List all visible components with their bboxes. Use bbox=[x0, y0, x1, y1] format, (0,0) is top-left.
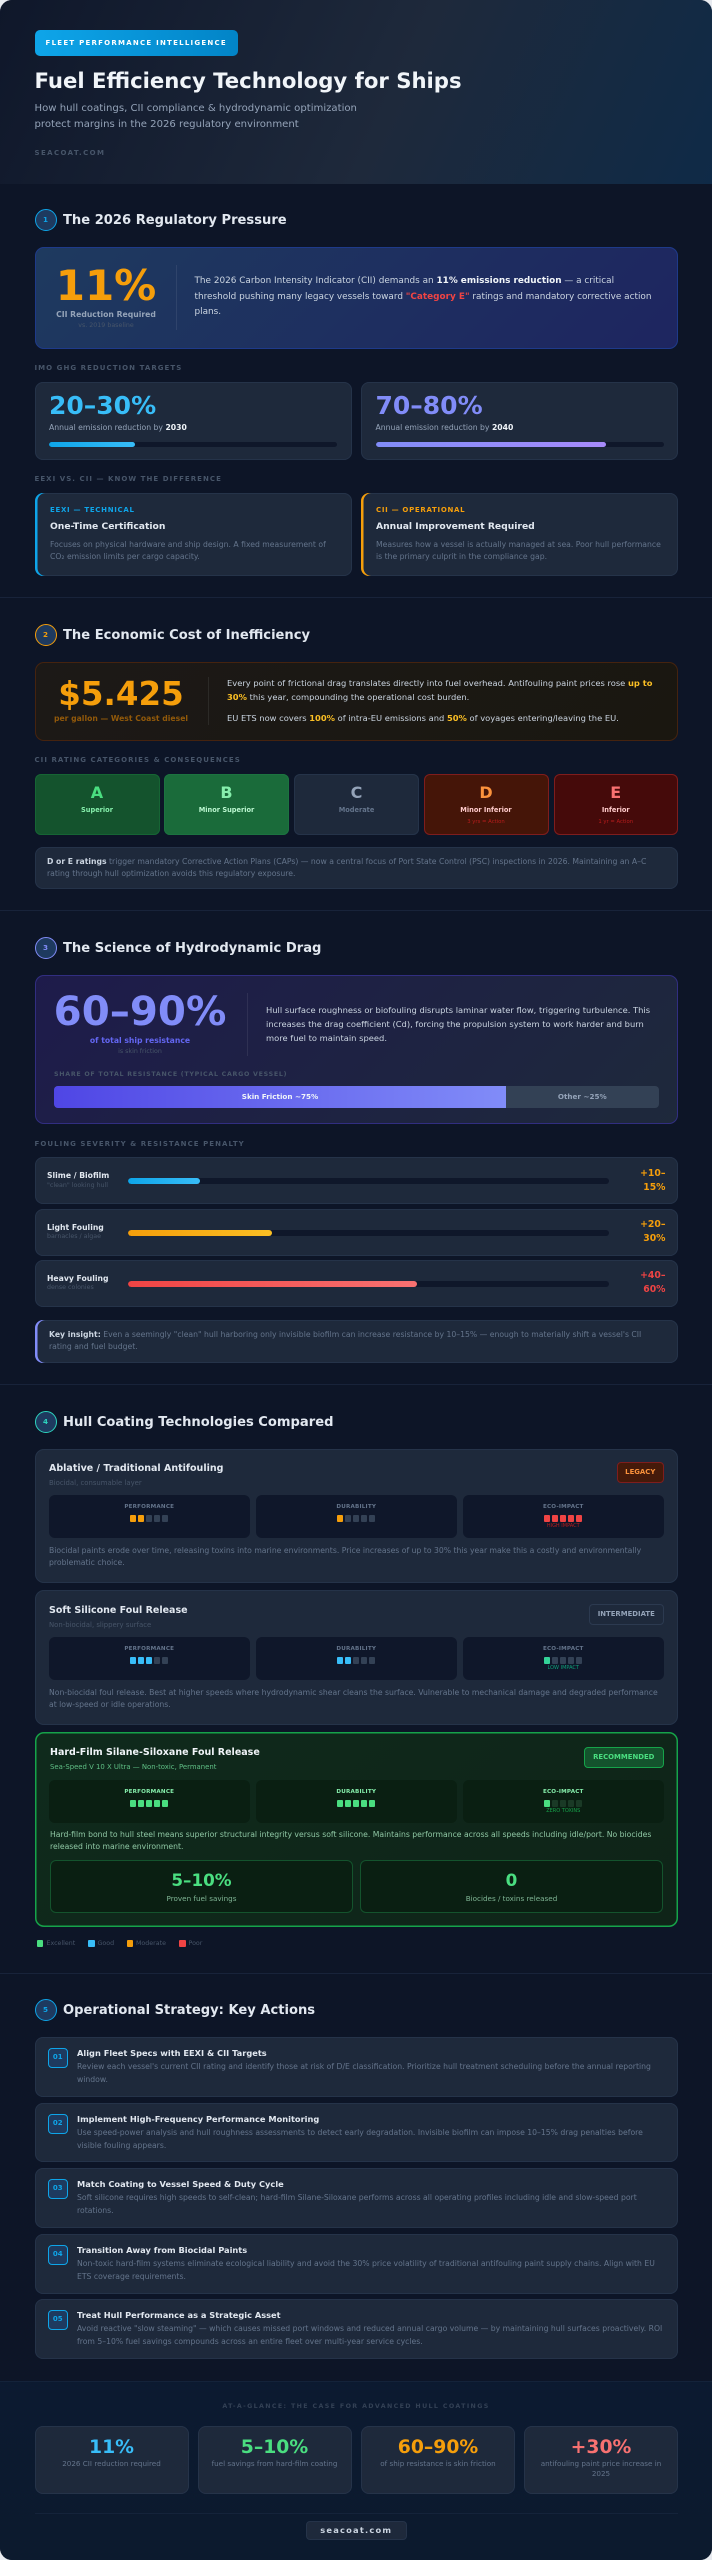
metric performance bbox=[49, 1495, 250, 1538]
note text: rating through hull optimization avoids this regulatory exposure. bbox=[47, 869, 295, 878]
description: problematic choice. bbox=[49, 1558, 125, 1567]
name: Hard-Film Silane-Siloxane Foul Release bbox=[50, 1747, 260, 1758]
description: Soft silicone requires high speeds to self-clean; hard-film Silane-Siloxane performs across all operating profiles including idle and slow-speed port bbox=[77, 2193, 637, 2202]
panel: fuel price hero bbox=[34, 662, 678, 741]
description bbox=[50, 540, 326, 561]
moderate swatch bbox=[126, 1940, 133, 1947]
subtitle: Sea-Speed V 10 X Ultra — Non-toxic, Permanent bbox=[50, 1762, 216, 1770]
value: 15% bbox=[643, 1182, 666, 1192]
section 2 number bbox=[34, 624, 56, 646]
rating dots bbox=[130, 1657, 168, 1664]
letter: B bbox=[220, 783, 233, 802]
description: CO₂ emission limits per cargo capacity. bbox=[50, 552, 200, 561]
hero text 2: EU ETS now covers 100% of intra-EU emissions and 50% of voyages entering/leaving the EU. bbox=[227, 713, 619, 723]
subtitle bbox=[34, 103, 357, 130]
panel: drag hero bbox=[34, 975, 678, 1124]
description: Annual emission reduction by 2040 bbox=[376, 423, 513, 432]
badge: FLEET PERFORMANCE INTELLIGENCE bbox=[46, 39, 227, 47]
rating dots bbox=[130, 1515, 168, 1522]
description bbox=[77, 2259, 655, 2281]
consequence: 3 yrs = Action bbox=[467, 818, 505, 824]
section 1 heading: The 2026 Regulatory Pressure bbox=[63, 213, 287, 228]
section label: fouling: FOULING SEVERITY & RESISTANCE PENALTY bbox=[34, 1140, 245, 1148]
summary card 5-10% bbox=[198, 2426, 352, 2494]
hero text: plans. bbox=[194, 307, 221, 317]
impact note: ZERO TOXINS bbox=[546, 1808, 580, 1814]
number bbox=[48, 2245, 68, 2264]
tag: CII — OPERATIONAL bbox=[376, 506, 465, 514]
price label: per gallon — West Coast diesel bbox=[54, 714, 188, 723]
description: Use speed-power analysis and hull roughness assessments to detect early degradation. Invisible biofilm can impose 10–15% drag penalties before bbox=[77, 2128, 643, 2137]
label: DURABILITY bbox=[336, 1788, 376, 1794]
rating dots bbox=[130, 1800, 168, 1807]
name: Heavy Fouling bbox=[47, 1274, 108, 1282]
title: Fuel Efficiency Technology for Ships bbox=[34, 68, 462, 93]
label bbox=[541, 2459, 661, 2478]
hero text bbox=[194, 276, 651, 317]
metric eco-impact bbox=[463, 1495, 664, 1538]
section 1 number: 1 bbox=[43, 215, 48, 224]
value: 11% bbox=[89, 2437, 134, 2458]
badge legacy: LEGACY bbox=[625, 1468, 655, 1476]
description bbox=[77, 2193, 637, 2215]
description: Review each vessel's current CII rating and identify those at risk of D/E classification. Prioritize hull treatment scheduling before the annual reporting bbox=[77, 2062, 651, 2071]
panel: EEXI bbox=[34, 493, 352, 576]
row: slime bbox=[34, 1157, 678, 1204]
description: Hard-film bond to hull steel means superior structural integrity versus soft silicone. Maintains performance across all speeds including idle/port. No biocides bbox=[50, 1830, 651, 1839]
name: Slime / Biofilm bbox=[47, 1171, 109, 1180]
stat sublabel: vs. 2019 baseline bbox=[78, 322, 134, 328]
skin friction segment bbox=[54, 1086, 506, 1108]
heading: Match Coating to Vessel Speed & Duty Cycle bbox=[77, 2179, 284, 2189]
name: Ablative / Traditional Antifouling bbox=[49, 1463, 223, 1474]
description: Avoid reactive "slow steaming" — which causes missed port windows and reduced annual cargo volume — by maintaining hull surfaces proactively. ROI bbox=[77, 2324, 662, 2333]
action 04 bbox=[34, 2234, 678, 2294]
action 01 bbox=[34, 2037, 678, 2097]
badge intermediate bbox=[589, 1604, 664, 1625]
note: D or E ratings bbox=[34, 847, 678, 889]
value: 30% bbox=[643, 1233, 666, 1244]
section 5 number bbox=[34, 1999, 56, 2021]
footer heading: AT-A-GLANCE: THE CASE FOR ADVANCED HULL COATINGS bbox=[222, 2403, 490, 2410]
section 2 heading: The Economic Cost of Inefficiency bbox=[63, 628, 310, 643]
note: dense colonies bbox=[47, 1284, 94, 1291]
letter: D bbox=[479, 783, 493, 802]
label: 2025 bbox=[592, 2469, 610, 2478]
label: Proven fuel savings bbox=[166, 1894, 236, 1903]
heading: Transition Away from Biocidal Paints bbox=[77, 2245, 247, 2255]
value: 5–10% bbox=[241, 2437, 308, 2458]
hero text: 30% this year, compounding the operational cost burden. bbox=[227, 692, 469, 702]
source label: SEACOAT.COM bbox=[34, 149, 105, 157]
tag: EEXI — TECHNICAL bbox=[50, 506, 135, 514]
subtitle: How hull coatings, CII compliance & hydrodynamic optimization bbox=[34, 103, 357, 114]
section 2 number: 2 bbox=[43, 630, 48, 639]
section 4 number bbox=[34, 1411, 56, 1433]
callout: key insight bbox=[34, 1320, 678, 1363]
value: 60–90% bbox=[398, 2437, 478, 2458]
section label: EEXI vs CII: EEXI VS. CII — KNOW THE DIFFERENCE bbox=[34, 475, 222, 483]
metric performance bbox=[49, 1637, 250, 1680]
section 3 number: 3 bbox=[43, 943, 48, 952]
rating dots bbox=[544, 1800, 582, 1807]
value: +10– bbox=[640, 1168, 666, 1178]
name: Moderate bbox=[339, 806, 374, 814]
progress bar bbox=[49, 442, 337, 447]
metric durability bbox=[256, 1495, 456, 1538]
description: visible fouling appears. bbox=[77, 2141, 166, 2150]
value: 70–80% bbox=[376, 391, 483, 420]
label: ECO-IMPACT bbox=[543, 1504, 584, 1510]
value bbox=[640, 1270, 666, 1295]
legend bbox=[37, 1940, 202, 1947]
letter: E bbox=[610, 783, 621, 802]
heading: Annual Improvement Required bbox=[376, 521, 535, 532]
subtitle: protect margins in the 2026 regulatory environment bbox=[34, 119, 299, 130]
description: from 5–10% fuel savings compounds across an entire fleet over multi-year service cycles. bbox=[77, 2337, 423, 2346]
number bbox=[48, 2048, 68, 2068]
note: barnacles / algae bbox=[47, 1233, 101, 1240]
label: 2026 CII reduction required bbox=[62, 2459, 161, 2468]
metric eco-impact bbox=[463, 1780, 664, 1823]
letter: A bbox=[91, 783, 103, 802]
number bbox=[48, 2114, 68, 2134]
skin friction segment: Skin Friction ~75% bbox=[242, 1092, 318, 1101]
stat label: of total ship resistance bbox=[90, 1036, 190, 1045]
label: PERFORMANCE bbox=[124, 1646, 174, 1652]
subtitle: Non-biocidal, slippery surface bbox=[49, 1620, 151, 1628]
heading: Implement High-Frequency Performance Monitoring bbox=[77, 2114, 319, 2124]
description bbox=[49, 1688, 658, 1709]
description bbox=[376, 540, 661, 561]
description bbox=[49, 1546, 641, 1567]
section 3 number bbox=[34, 937, 56, 959]
big stat: 60–90% bbox=[54, 988, 226, 1035]
badge recommended bbox=[584, 1747, 664, 1768]
metric eco-impact bbox=[463, 1637, 664, 1680]
value: +40– bbox=[640, 1270, 666, 1281]
name: Minor Inferior bbox=[460, 806, 512, 814]
big stat 11%: 11% bbox=[56, 261, 156, 310]
hero text: increases the drag coefficient (Cd), forcing the propulsion system to work harder and burn bbox=[266, 1019, 644, 1029]
impact note: HIGH IMPACT bbox=[547, 1523, 580, 1529]
footer band bbox=[0, 2381, 712, 2560]
hero text bbox=[266, 1005, 650, 1043]
section 4 heading: Hull Coating Technologies Compared bbox=[63, 1415, 333, 1430]
rating dots bbox=[544, 1657, 582, 1664]
progress bar bbox=[376, 442, 664, 447]
badge legacy bbox=[617, 1462, 664, 1483]
footer button bbox=[306, 2521, 406, 2540]
number: 02 bbox=[53, 2119, 63, 2127]
number bbox=[48, 2310, 68, 2330]
label: antifouling paint price increase in bbox=[541, 2459, 661, 2468]
summary card +30% bbox=[524, 2426, 678, 2494]
number: 04 bbox=[53, 2250, 63, 2258]
subtitle: Biocidal, consumable layer bbox=[49, 1478, 142, 1486]
moderate label: Moderate bbox=[136, 1940, 166, 1947]
heading: Treat Hull Performance as a Strategic Asset bbox=[77, 2310, 281, 2320]
section 1 number bbox=[34, 209, 56, 231]
description: window. bbox=[77, 2075, 108, 2084]
name: Soft Silicone Foul Release bbox=[49, 1605, 188, 1616]
stat: fuel savings bbox=[50, 1860, 353, 1913]
callout text bbox=[49, 1330, 641, 1351]
value bbox=[640, 1219, 666, 1244]
hero text bbox=[227, 678, 652, 702]
rating dots bbox=[337, 1657, 375, 1664]
label: PERFORMANCE bbox=[124, 1504, 174, 1510]
stat label: CII Reduction Required bbox=[56, 310, 156, 319]
label: ECO-IMPACT bbox=[543, 1788, 584, 1794]
description bbox=[77, 2062, 651, 2084]
section 4 number: 4 bbox=[43, 1417, 48, 1426]
description bbox=[77, 2128, 643, 2150]
action 05 bbox=[34, 2299, 678, 2359]
description: Measures how a vessel is actually managed at sea. Poor hull performance bbox=[376, 540, 661, 549]
letter: C bbox=[351, 783, 362, 802]
note: "clean" looking hull bbox=[47, 1182, 108, 1189]
number: 03 bbox=[53, 2184, 63, 2192]
excellent label: Excellent bbox=[46, 1940, 75, 1947]
row: light fouling bbox=[34, 1208, 678, 1256]
panel: ablative coating bbox=[34, 1449, 678, 1583]
label: Biocides / toxins released bbox=[466, 1894, 557, 1903]
section label: targets: IMO GHG REDUCTION TARGETS bbox=[34, 364, 182, 372]
consequence: 1 yr = Action bbox=[598, 818, 633, 824]
hero text: Hull surface roughness or biofouling disrupts laminar water flow, triggering turbulence. This bbox=[266, 1005, 650, 1015]
badge intermediate: INTERMEDIATE bbox=[598, 1610, 655, 1618]
rating D bbox=[424, 774, 548, 835]
value: 0 bbox=[506, 1870, 517, 1890]
number bbox=[48, 2179, 68, 2198]
description: released into marine environment. bbox=[50, 1842, 183, 1851]
label: PERFORMANCE bbox=[124, 1788, 174, 1794]
rating dots bbox=[337, 1800, 375, 1807]
description: at low-speed or idle operations. bbox=[49, 1700, 171, 1709]
excellent swatch bbox=[36, 1940, 43, 1947]
description: Biocidal paints erode over time, releasing toxins into marine environments. Price increases of up to 30% this year make this a costly and environmentally bbox=[49, 1546, 641, 1555]
bar label: SHARE OF TOTAL RESISTANCE (TYPICAL CARGO VESSEL) bbox=[54, 1071, 287, 1078]
section 5 number: 5 bbox=[43, 2005, 48, 2014]
bar bbox=[128, 1280, 609, 1286]
number: 05 bbox=[53, 2315, 63, 2323]
hero text: Every point of frictional drag translates directly into fuel overhead. Antifouling paint prices rose up to bbox=[227, 678, 652, 688]
name: Minor Superior bbox=[199, 806, 254, 814]
rating A bbox=[34, 774, 160, 835]
panel: 2030 target bbox=[34, 382, 352, 460]
value: 20–30% bbox=[49, 391, 156, 420]
action 02 bbox=[34, 2103, 678, 2162]
panel: 2040 target bbox=[360, 382, 678, 460]
value: 60% bbox=[643, 1284, 666, 1295]
rating C bbox=[294, 774, 419, 835]
price: $5.425 bbox=[58, 675, 184, 713]
good label: Good bbox=[98, 1940, 114, 1947]
heading: Align Fleet Specs with EEXI & CII Targets bbox=[77, 2048, 267, 2058]
note text: D or E ratings trigger mandatory Corrective Action Plans (CAPs) — now a central focus of Port State Control (PSC) inspections in 2026. Maintaining an A–C bbox=[47, 857, 646, 866]
stat sublabel: is skin friction bbox=[118, 1048, 162, 1055]
panel: 11% hero bbox=[34, 247, 678, 349]
label: fuel savings from hard-film coating bbox=[212, 2459, 337, 2468]
bar bbox=[128, 1178, 609, 1184]
metric durability bbox=[256, 1780, 456, 1823]
heading: One-Time Certification bbox=[50, 521, 165, 532]
poor swatch bbox=[179, 1940, 186, 1947]
description bbox=[50, 1830, 651, 1851]
summary card 11% bbox=[34, 2426, 188, 2494]
rating dots bbox=[337, 1515, 375, 1522]
metric performance bbox=[49, 1780, 250, 1823]
name: Light Fouling bbox=[47, 1222, 104, 1232]
label: DURABILITY bbox=[336, 1646, 376, 1652]
value: +20– bbox=[640, 1219, 666, 1230]
number: 01 bbox=[53, 2053, 63, 2061]
label: of ship resistance is skin friction bbox=[380, 2459, 496, 2468]
label: DURABILITY bbox=[336, 1504, 376, 1510]
value: 5–10% bbox=[171, 1870, 232, 1890]
badge recommended: RECOMMENDED bbox=[593, 1753, 654, 1761]
panel: soft silicone coating bbox=[34, 1590, 678, 1725]
header banner bbox=[0, 0, 712, 184]
badge bbox=[34, 30, 238, 56]
bar bbox=[128, 1230, 609, 1236]
description: Annual emission reduction by 2030 bbox=[49, 423, 187, 432]
metric durability bbox=[256, 1637, 456, 1680]
good swatch bbox=[88, 1940, 94, 1947]
description: is the primary culprit in the compliance gap. bbox=[376, 552, 547, 561]
section 5 heading: Operational Strategy: Key Actions bbox=[63, 2003, 315, 2018]
description: Non-biocidal foul release. Best at higher speeds where hydrodynamic shear cleans the surface. Vulnerable to mechanical damage and degraded performance bbox=[49, 1688, 658, 1697]
panel: CII bbox=[360, 493, 678, 576]
footer button: seacoat.com bbox=[320, 2525, 392, 2535]
callout text: Key insight: Even a seemingly "clean" hull harboring only invisible biofilm can increase resistance by 10–15% — enough to materially shift a vessel's CII bbox=[49, 1330, 641, 1339]
other segment: Other ~25% bbox=[558, 1092, 607, 1101]
summary card 60-90% bbox=[361, 2426, 515, 2494]
description: Focuses on physical hardware and ship design. A fixed measurement of bbox=[50, 540, 326, 549]
description: rotations. bbox=[77, 2206, 114, 2215]
row: heavy fouling bbox=[34, 1260, 678, 1306]
rating B bbox=[164, 774, 289, 835]
note text bbox=[47, 857, 646, 878]
description: Non-toxic hard-film systems eliminate ecological liability and avoid the 30% price volatility of traditional antifouling paint supply chains. Align with EU bbox=[77, 2259, 655, 2268]
label: ECO-IMPACT bbox=[543, 1646, 584, 1652]
panel: hard-film coating (recommended) bbox=[34, 1732, 678, 1927]
stat: biocides bbox=[360, 1860, 663, 1913]
name: Superior bbox=[81, 806, 113, 814]
hero text: threshold pushing many legacy vessels toward "Category E" ratings and mandatory corrective action bbox=[194, 292, 651, 302]
callout text: rating and fuel budget. bbox=[49, 1342, 138, 1351]
description: ETS coverage requirements. bbox=[77, 2272, 186, 2281]
impact note: LOW IMPACT bbox=[548, 1665, 579, 1671]
value bbox=[640, 1168, 666, 1192]
rating E bbox=[554, 774, 678, 835]
name: Inferior bbox=[602, 806, 630, 814]
rating dots bbox=[544, 1515, 582, 1522]
poor label: Poor bbox=[188, 1940, 202, 1947]
stacked bar bbox=[54, 1086, 658, 1108]
section label: rating categories: CII RATING CATEGORIES & CONSEQUENCES bbox=[34, 756, 241, 764]
value: +30% bbox=[571, 2437, 631, 2458]
section 3 heading: The Science of Hydrodynamic Drag bbox=[63, 941, 321, 956]
hero text: more fuel to maintain speed. bbox=[266, 1033, 387, 1043]
hero text: The 2026 Carbon Intensity Indicator (CII) demands an 11% emissions reduction — a critical bbox=[194, 276, 614, 286]
description bbox=[77, 2324, 662, 2346]
action 03 bbox=[34, 2168, 678, 2228]
